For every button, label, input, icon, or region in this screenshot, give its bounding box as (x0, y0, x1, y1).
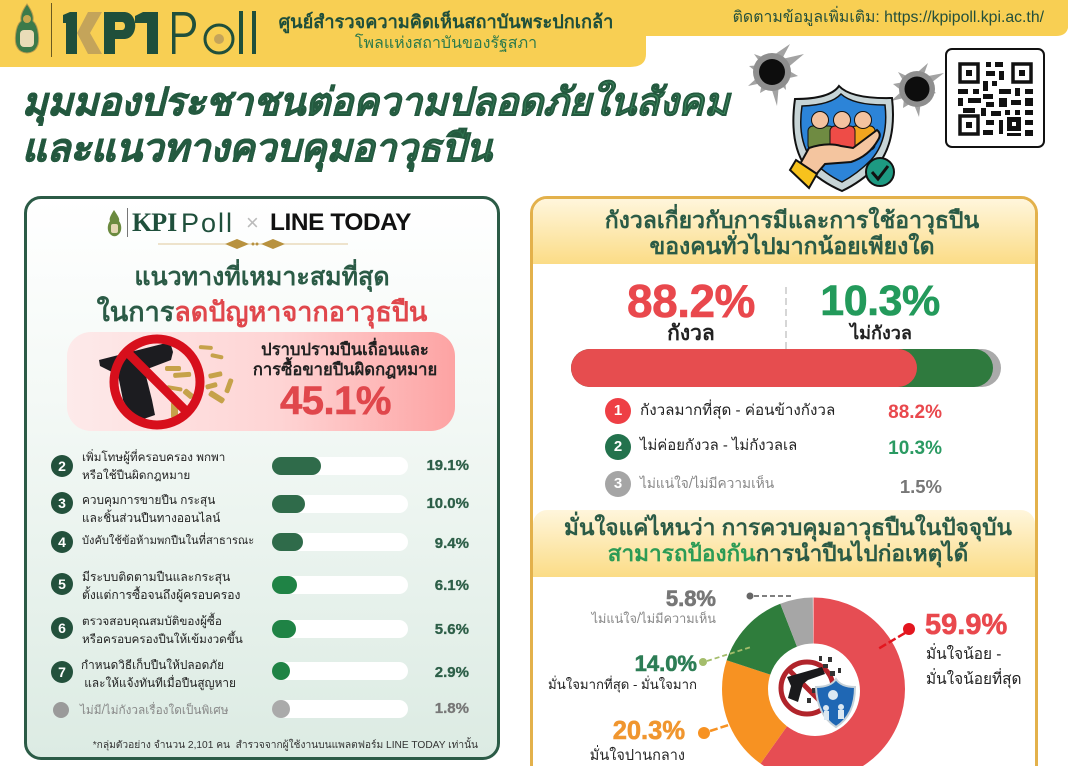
row 6: 6 (58, 620, 66, 636)
row 6: ตรวจสอบคุณสมบัติของผู้ซื้อ (82, 615, 222, 628)
legend: unsure (605, 471, 942, 497)
stacked bar (571, 349, 1001, 387)
legend: not worried (605, 434, 942, 460)
stat: worried: 88.2% (627, 275, 755, 327)
left heading: แนวทางที่เหมาะสมที่สุด (134, 263, 390, 291)
icon: bullet hole right (893, 63, 944, 117)
row 3: 3 (58, 495, 66, 511)
row 7: และให้แจ้งทันทีเมื่อปืนสูญหาย (84, 676, 236, 690)
dashed divider (785, 287, 787, 349)
icon: bullet hole left (748, 44, 804, 106)
heading band: confidence (533, 510, 1035, 577)
row 3: และชิ้นส่วนปืนทางออนไลน์ (82, 510, 220, 524)
header title: ศูนย์สำรวจความคิดเห็นสถาบันพระปกเกล้า (279, 12, 613, 32)
row 3: ควบคุมการขายปืน กระสุน (82, 493, 215, 507)
callout: moderate (590, 717, 685, 764)
logo: KPI Poll x LINE TODAY: × (246, 210, 259, 235)
row 7 (51, 658, 469, 690)
donut chart (722, 598, 905, 766)
callout: low confidence: 59.9% (925, 609, 1007, 641)
heading: worry (605, 204, 980, 259)
legend: not worried: ไม่ค่อยกังวล - ไม่กังวลเล (640, 438, 797, 454)
callout: low confidence (925, 609, 1022, 688)
row 2: 19.1% (426, 457, 469, 474)
row 5: 6.1% (435, 577, 469, 594)
logo: KPI Poll x LINE TODAY: KPI (132, 208, 177, 237)
row 2: 2 (58, 458, 66, 474)
logo: KPI Poll (14, 3, 256, 57)
row 6: 5.6% (435, 621, 469, 638)
row 3: 10.0% (426, 495, 469, 512)
row 2: เพิ่มโทษผู้ที่ครอบครอง พกพา (82, 451, 225, 464)
row 5: 5 (58, 576, 66, 592)
footnote: *กลุ่มตัวอย่าง จำนวน 2,101 คน สำรวจจากผู้ใช้งานบนแพลตฟอร์ม LINE TODAY เท่านั้น (93, 740, 478, 751)
callout line: orange (698, 724, 728, 739)
row 6 (51, 612, 469, 646)
row other: 1.8% (435, 700, 469, 717)
legend: worried: 1 (614, 402, 622, 419)
row 4: 4 (58, 534, 66, 550)
callout: unsure: 5.8% (666, 586, 716, 611)
heading: confidence (564, 512, 1012, 568)
header band (0, 0, 1068, 67)
row 2 (51, 449, 469, 482)
callout: very confident (548, 651, 697, 692)
row 4 (51, 531, 469, 553)
callout line: green (699, 646, 750, 666)
header subtitle: โพลแห่งสถาบันของรัฐสภา (355, 35, 537, 52)
header link: ติดตามข้อมูลเพิ่มเติม: https://kpipoll.kpi.ac.th/ (733, 9, 1044, 26)
icon: shield with hand and people (788, 84, 895, 192)
legend: worried: 88.2% (888, 402, 942, 423)
heading band: worry (533, 199, 1035, 264)
legend: not worried: 2 (614, 438, 622, 455)
stat: not worried: ไม่กังวล (850, 323, 912, 343)
left heading: ในการลดปัญหาจากอาวุธปืน (97, 297, 427, 327)
row 5: ตั้งแต่การซื้อจนถึงผู้ครอบครอง (82, 588, 240, 602)
row 2: หรือใช้ปืนผิดกฎหมาย (82, 468, 190, 482)
legend: not worried: 10.3% (888, 438, 942, 459)
top answer text: การซื้อขายปืนผิดกฎหมาย (253, 360, 437, 379)
legend: unsure: ไม่แน่ใจ/ไม่มีความเห็น (640, 476, 774, 491)
callout: unsure (590, 586, 716, 626)
row 7: 2.9% (435, 664, 469, 681)
row 4: บังคับใช้ข้อห้ามพกปืนในที่สาธารณะ (82, 535, 254, 547)
logo: KPI Poll x LINE TODAY (108, 208, 411, 238)
row 4: 9.4% (435, 535, 469, 552)
logo: KPI Poll x LINE TODAY: LINE TODAY (270, 209, 411, 236)
panel: right (530, 196, 1038, 766)
heading: worry: กังวลเกี่ยวกับการมีและการใช้อาวุธปืน (605, 207, 979, 233)
row 7: 7 (58, 664, 66, 680)
callout line: red (878, 623, 915, 650)
callout: moderate: มั่นใจปานกลาง (590, 748, 685, 764)
stat: worried: กังวล (667, 322, 715, 345)
legend: unsure: 3 (614, 475, 622, 492)
row 5 (51, 570, 469, 602)
stat: not worried: 10.3% (820, 277, 940, 325)
panel: left recommendations (24, 196, 500, 760)
row 6: หรือครอบครองปืนให้เข้มงวดขึ้น (82, 632, 243, 646)
heading: confidence: สามารถป้องกันการนำปืนไปก่อเหตุได้ (608, 541, 968, 566)
ornament divider (158, 239, 348, 249)
heading: confidence: มั่นใจแค่ไหนว่า การควบคุมอาวุธปืนในปัจจุบัน (564, 515, 1012, 540)
main title (22, 80, 741, 172)
top answer text (253, 338, 437, 379)
callout: moderate: 20.3% (613, 717, 685, 745)
row 3 (51, 492, 469, 524)
logo: KPI Poll x LINE TODAY: Poll (181, 208, 234, 238)
icon: prohibited gun and bullets (99, 334, 234, 430)
left heading (97, 259, 428, 329)
heading: worry: ของคนทั่วไปมากน้อยเพียงใด (649, 233, 935, 259)
callout: very confident: 14.0% (635, 651, 697, 676)
row 7: กำหนดวิธีเก็บปืนให้ปลอดภัย (81, 658, 224, 672)
callout: low confidence: มั่นใจน้อย - (926, 646, 1001, 663)
legend: worried (605, 398, 942, 424)
legend: worried: กังวลมากที่สุด - ค่อนข้างกังวล (640, 402, 835, 419)
main title: มุมมองประชาชนต่อความปลอดภัยในสังคม (22, 81, 729, 124)
top answer banner (67, 332, 455, 431)
top answer text: ปราบปรามปืนเถื่อนและ (261, 340, 429, 359)
callout: unsure: ไม่แน่ใจ/ไม่มีความเห็น (592, 612, 716, 626)
row 5: มีระบบติดตามปืนและกระสุน (82, 570, 230, 584)
callout: very confident: มั่นใจมากที่สุด - มั่นใจมาก (548, 677, 697, 692)
row other: ไม่มี/ไม่กังวลเรื่องใดเป็นพิเศษ (80, 703, 229, 717)
top answer value: 45.1% (280, 379, 391, 423)
main title: และแนวทางควบคุมอาวุธปืน (22, 127, 492, 170)
QR code (945, 48, 1045, 148)
callout line: gray (746, 592, 791, 600)
row other (53, 700, 469, 718)
callout: low confidence: มั่นใจน้อยที่สุด (926, 671, 1022, 688)
legend: unsure: 1.5% (900, 476, 942, 497)
donut centre icon (778, 656, 860, 736)
